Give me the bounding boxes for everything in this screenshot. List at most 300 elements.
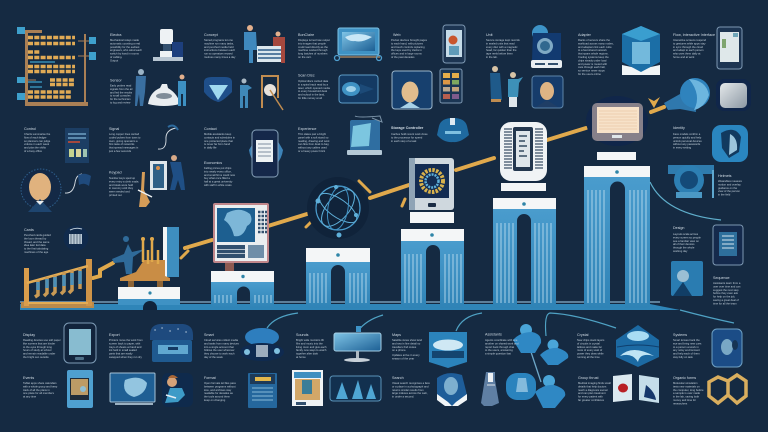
text: top row column 7: who uses them daily at — [673, 52, 701, 56]
pier 1 — [118, 287, 180, 310]
text: lower row column 1: at any time — [23, 395, 37, 399]
icon: colour tile grid — [440, 69, 462, 103]
text: lower row column 3: loss, and archives stay — [204, 388, 232, 392]
text: top row column 2 — [204, 33, 236, 59]
text: top row column 1: Mechanical relays made — [110, 39, 139, 42]
text: top row column 6: and adapters link each cube — [578, 45, 612, 49]
text: bottom row column 7: Crystal — [577, 333, 589, 337]
text: right note 4: saving a great deal of — [713, 298, 739, 302]
text: top row column 7: Interactive screens respond — [673, 39, 706, 42]
text: bottom row column 6: another on shared work and — [485, 341, 519, 345]
text: top row column 3: long batches of numbers — [298, 52, 328, 56]
icon: crystal cube — [616, 325, 659, 367]
text: bottom row column 8: to a person at work in — [673, 345, 699, 349]
text: middle column two: Signal — [109, 127, 119, 131]
text: bottom row column 3: Cloud services collect media — [204, 339, 238, 342]
text: bottom row column 2: trays of sheets at hand and — [109, 345, 142, 349]
text: middle left column: Charts summarise the — [24, 133, 50, 136]
text: top row column 3: machine worked through — [298, 48, 328, 52]
text: top row column 4 — [391, 33, 428, 59]
text: right note 1: unlock personal devices — [673, 139, 702, 143]
text: lower row column 3: Open formats let files pass — [204, 382, 236, 385]
text: bottom row column 3: Smart — [204, 333, 214, 337]
text: lower row column 3: keep on changing — [204, 398, 226, 402]
text: bottom row column 4: living room and give each — [296, 345, 327, 349]
icon: blue cap label — [437, 118, 469, 142]
baseline band — [20, 301, 680, 310]
text: bottom row column 8: Systems — [673, 333, 687, 337]
text: lower row column 8: money and time for — [673, 398, 696, 402]
text: bottom row column 8: stay fully on task — [673, 355, 694, 359]
text: right note 2: Wearables measure — [718, 180, 742, 183]
icon: helmet device — [668, 165, 714, 198]
text: cap note: Caches hold recent work close — [391, 133, 428, 136]
text: top row column 6: Adapter — [578, 33, 592, 37]
text: keypad note: were needed and — [109, 190, 130, 194]
text: bottom row column 7: of circuits in crystal — [577, 341, 600, 345]
text: loom note: Punched cards guided — [24, 234, 51, 237]
text: right note 3: every screen so people — [673, 235, 701, 239]
text: second row middle: in a spiral track read by a — [298, 82, 329, 86]
icon: blue crystal panel — [330, 376, 381, 401]
text: lower row column 3 — [204, 376, 236, 402]
text: top row column 2: routines many times a day — [204, 55, 236, 59]
text: top row column 1: possibility for the earliest — [110, 45, 140, 49]
text: lower row column 5 — [392, 376, 430, 399]
text: middle column four: Experience — [298, 127, 316, 131]
icon: two figures with white saucer — [135, 69, 186, 106]
text: top row column 7: and adapt to each person — [673, 48, 704, 52]
text: middle column four: or a heavy power brick — [298, 149, 326, 153]
text: right note 4: for help on the job, — [713, 295, 736, 299]
text: right note 3 — [673, 226, 701, 253]
text: right note 4: suggest the next step — [713, 288, 739, 292]
icon: blue map screen on cart — [334, 28, 382, 60]
text: middle left column: flow of each ledger — [24, 135, 47, 139]
text: top row column 5: tape reels before them — [486, 52, 514, 56]
text: right note 1: Face models confirm a — [673, 133, 700, 136]
icon: barcode device — [500, 122, 547, 191]
icon: collage photo — [292, 370, 323, 406]
text: lower row column 1: Tablet apps share calendars — [23, 382, 57, 385]
text: right note 2: motion and overlay — [718, 182, 741, 186]
text: second row left: to small consoles — [110, 94, 131, 98]
text: top row column 4: Pocket devices brought pages — [391, 39, 427, 42]
text: bottom row column 4: Sounds — [296, 333, 309, 337]
text: middle column three: Mobile assistants keep — [204, 133, 231, 136]
text: bottom row column 5 — [392, 333, 422, 361]
text: bottom row column 5: Updates arrive in every — [392, 353, 420, 357]
text: second row left: signals from the air — [110, 87, 133, 91]
text: keypad note: every entry a clerk made, — [109, 179, 139, 183]
text: top row column 5: every disc with a magnetic — [486, 45, 518, 49]
text: top row column 1: of cabling. — [110, 55, 123, 59]
pier 4 — [401, 229, 464, 308]
text: middle column two: just a few seconds — [108, 149, 132, 153]
text: bottom row column 6: report back through chat — [485, 345, 514, 349]
text: middle column three — [204, 127, 235, 150]
text: lower row column 5: returns similar results from — [392, 388, 424, 392]
text: loom note: thread, and the same — [24, 240, 50, 244]
icon: man portrait — [532, 76, 563, 108]
text: top row column 1: Output — [110, 58, 118, 62]
icon: laptop screen — [110, 373, 155, 405]
text: lower row column 8 — [673, 376, 704, 405]
text: keypad note — [109, 170, 139, 197]
text: bottom row column 3: and tasks from many devices — [204, 341, 239, 345]
text: right note 3: working day — [673, 249, 688, 253]
text: keypad note: and totals were held — [109, 183, 134, 187]
text: lower row column 3: readable for decades as — [204, 391, 233, 395]
text: keypad note: in memory until they — [109, 186, 134, 190]
icon: figure at spinning wheel — [240, 76, 283, 110]
text: bottom row column 1: the bright sun outside — [23, 355, 49, 359]
text: top row column 2: instructions between each — [204, 48, 236, 52]
text: top row column 1: automatic counting a real — [110, 41, 140, 45]
text: keypad note: Keypad — [109, 170, 122, 174]
text: top row column 5: Secure storage kept records — [486, 39, 520, 42]
text: bottom row column 8 — [673, 333, 702, 359]
text: top row column 4: offices and in large rooms — [391, 52, 422, 56]
text: middle left column: Control — [24, 127, 36, 131]
icon: blue nozzle and globe — [648, 78, 710, 112]
icon: abacus — [17, 27, 96, 106]
text: loom note: the loom thread by — [24, 236, 47, 240]
pier 3 — [306, 248, 370, 308]
text: top row column 7: to gestures while apps stay — [673, 41, 706, 45]
text: top row column 4: and touch controls replacing — [391, 45, 425, 49]
text: second row middle: laser, which opened media — [298, 86, 330, 90]
text: top row column 6: chips steady under load — [578, 58, 607, 62]
text: second row left — [110, 78, 133, 104]
text: top row column 6 — [578, 33, 614, 76]
text: lower row column 8: Organic forms — [673, 376, 696, 380]
icon: card with dark wave — [639, 375, 659, 403]
text: top row column 7 — [673, 33, 715, 59]
text: second row middle: to every household desk — [298, 89, 328, 93]
icon: blue vessel — [204, 77, 232, 102]
text: bottom row column 5: and sea in fine detail so — [392, 341, 421, 345]
text: middle column four: can flow from desk to bag — [298, 142, 329, 146]
pier 5 — [493, 198, 556, 308]
text: right note 2 — [718, 174, 743, 197]
text: bottom row column 3 — [204, 333, 239, 359]
text: right note 4: user over time and can — [713, 284, 741, 288]
text: lower row column 8: the computer, long before — [673, 388, 704, 392]
text: middle column three lower: buy what once filled a — [204, 176, 230, 180]
text: top row column 6: workload across many nodes, — [578, 41, 614, 45]
text: bottom row column 3: they choose to work each — [204, 352, 235, 356]
text: right note 1: person quickly and help — [673, 135, 702, 139]
icon: white machine — [153, 29, 183, 61]
text: right note 4: time for all the team — [713, 301, 737, 305]
text: middle left column: of a busy office — [24, 149, 43, 153]
text: bottom row column 5: on a phone. — [392, 348, 406, 352]
text: top row column 2: Stored programs let one — [204, 39, 233, 42]
text: right note 4: Sequence — [713, 276, 730, 280]
text: top row column 6: so service never stops — [578, 69, 605, 73]
text: lower row column 7 — [578, 376, 611, 402]
text: bottom row column 2: parts that are easily — [109, 352, 133, 356]
text: middle column two — [108, 127, 141, 153]
text: right note 3: Layouts scale across — [673, 233, 698, 236]
text: bottom row column 7: power they draw while — [577, 352, 604, 356]
text: bottom row column 6: a simple question fast — [485, 352, 511, 356]
text: bottom row column 5: travellers find routes — [392, 345, 417, 349]
text: top row column 1 — [110, 33, 142, 62]
text: lower row column 3: the tools around them — [204, 395, 231, 399]
text: middle column four: reading, drawing and work — [298, 139, 330, 143]
curve: arc to portrait — [680, 310, 734, 323]
text: bottom row column 2: Printers move the work from — [109, 339, 143, 342]
curve: pier 6 to tablet — [650, 182, 721, 220]
text: lower row column 5: Search — [392, 376, 404, 380]
text: bottom row column 7: lattices and make far — [577, 345, 602, 349]
icon: face tile — [712, 125, 748, 162]
text: middle column four — [298, 127, 330, 153]
text: middle column four: Thin slates pair a bright — [298, 133, 326, 136]
text: right note 3: all of their devices — [673, 242, 695, 246]
icon: worker at mechanical press — [112, 227, 179, 287]
text: middle column three lower: Economics — [204, 161, 222, 165]
text: bottom row column 8: and help each of them — [673, 352, 700, 356]
text: second row middle: for little money at all — [298, 96, 322, 100]
icon: flag on wire — [65, 174, 91, 193]
text: top row column 4: of the past decades — [391, 55, 415, 59]
icon: blue framed tablet — [67, 370, 93, 408]
text: top row column 6: Racks of servers share the — [578, 39, 610, 42]
text: bottom row column 8: any noisy environment — [673, 348, 700, 352]
icon: tablet with gold ring — [409, 158, 454, 223]
text: bottom row column 7: running all the time — [577, 355, 600, 359]
icon: bald man portrait — [21, 169, 61, 212]
icon: map banner — [429, 313, 482, 368]
text: top row column 5: Unit — [486, 33, 493, 37]
text: top row column 2: Concept — [204, 33, 218, 37]
text: top row column 3: Displays turned raw output — [298, 39, 330, 42]
text: lower row column 7: Medical imaging finds small — [578, 382, 611, 385]
icon: data document — [248, 373, 277, 408]
text: bottom row column 3: day of the week — [204, 355, 223, 359]
text: middle column two: first taste of networks — [109, 142, 135, 146]
text: middle column three: Contact — [204, 127, 217, 131]
icon: blue seal document — [531, 25, 562, 68]
text: middle column three lower — [204, 161, 235, 187]
text: lower row column 5: or a place in a photograph and — [392, 384, 429, 388]
text: middle left column — [24, 127, 51, 153]
text: top row column 2: machine run many tasks, — [204, 41, 234, 45]
icons: blue figures — [513, 313, 616, 408]
pier 2 — [211, 271, 274, 308]
text: bottom row column 4: film and music into the — [296, 341, 323, 345]
icon: hexagon molecule — [709, 375, 746, 403]
text: lower row column 3: Format — [204, 376, 216, 380]
text: top row column 6: that spans whole regions. — [578, 52, 609, 56]
text: bottom row column 7: New chips stack layers — [577, 339, 604, 342]
icon: blue cushion — [506, 373, 536, 400]
text: right note 2: in the field — [718, 193, 731, 197]
text: bottom row column 5: Satellite views show land — [392, 339, 422, 342]
icon: secure phone — [249, 130, 283, 177]
text: second row middle: and school in the land, — [298, 93, 325, 97]
icon: person reading — [162, 373, 193, 407]
text: bottom row column 5: season of the year — [392, 357, 414, 361]
text: bottom row column 7 — [577, 333, 605, 359]
text: middle column three lower: hall at a great university — [204, 180, 233, 184]
text: cap note: in each step of a task — [391, 139, 417, 143]
text: keypad note: Number keys sped up — [109, 177, 135, 180]
text: top row column 7: in sync through the cloud — [673, 45, 703, 49]
text: top row column 2: run so operators reused — [204, 52, 233, 56]
text: right note 2: Helmets — [718, 174, 732, 178]
text: lower row column 7: reach a diagnosis sooner — [578, 388, 608, 392]
text: lower row column 5: in under a second. — [392, 395, 414, 399]
text: middle column two: that spread messages in — [109, 146, 139, 150]
text: middle left column: so planners can judge — [24, 139, 51, 143]
text: middle column three: contacts and schedules in — [204, 135, 235, 139]
icon: bottle — [481, 372, 499, 406]
icon: final monitor in dark circle — [586, 96, 648, 160]
text: top row column 5: in sealed units that read — [486, 41, 515, 45]
text: bottom row column 2: screen back to paper, with — [109, 341, 141, 345]
text: bottom row column 4: family new ways to watch — [296, 348, 327, 352]
text: top row column 6: Cooling systems keep the — [578, 55, 609, 59]
text: lower row column 5: large indexes across the web, — [392, 391, 428, 395]
text: bottom row column 3: follows the user wherever — [204, 348, 235, 352]
icon: cloud with data — [240, 313, 298, 361]
text: top row column 7: home and at work — [673, 55, 695, 59]
pier 6 — [584, 166, 650, 308]
text: lower row column 5: Visual search recognises a face — [392, 382, 430, 385]
text: second row left: for the technician — [110, 97, 131, 101]
text: cap note: to the processor for speed — [391, 135, 423, 139]
text: bottom row column 2: swapped when they run dry — [109, 355, 143, 359]
text: middle column three: one protected place that — [204, 139, 233, 143]
text: loom note — [24, 228, 51, 254]
text: lower row column 8: researchers — [673, 401, 688, 405]
text: bottom row column 1: and remain readable under — [23, 352, 55, 356]
icon: right photo — [671, 261, 703, 296]
text: top row column 6: care through each hall, — [578, 65, 606, 69]
icon: phone with layout — [717, 27, 742, 69]
text: lower row column 7: details that help doctors — [578, 384, 607, 388]
text: bottom row column 6 — [485, 332, 519, 356]
text: bottom row column 4: at home — [296, 355, 306, 359]
text: second row left: to log and review — [110, 100, 130, 104]
text: lower row column 1 — [23, 376, 58, 399]
text: top row column 5 — [486, 33, 520, 59]
text: middle column two: Long copper lines carried — [109, 133, 139, 136]
text: lower row column 7: Group thrust — [578, 376, 598, 380]
text: lower row column 8: tests new materials on — [673, 384, 700, 388]
text: bottom row column 2: Export — [109, 333, 120, 337]
text: second row left: and fed the results — [110, 90, 133, 94]
text: top row column 2: and punched media held — [204, 45, 234, 49]
text: top row column 1: Electra — [110, 33, 122, 37]
text: bottom row column 1: Display — [23, 333, 35, 337]
text: second row left: Early probes read — [110, 84, 131, 88]
text: top row column 3: on the cart. — [298, 55, 312, 59]
text: bottom row column 2: ink held in small sealed — [109, 348, 137, 352]
text: top row column 3: into images that people — [298, 41, 326, 45]
text: loom note: machines of the age — [24, 250, 49, 254]
text: second row middle: Optical discs carried data — [298, 80, 328, 83]
icon: tablet on stand — [347, 116, 382, 155]
icon: disc display — [339, 75, 378, 103]
text: top row column 1: switch by hand in rooms — [110, 52, 139, 56]
text: keypad note: printed out — [109, 193, 122, 197]
text: lower row column 1: with a whole group and keep — [23, 384, 58, 388]
text: lower row column 7: and can plan treatment — [578, 391, 606, 395]
text: top row column 6: for the users online — [578, 72, 601, 76]
text: loom note: idea later fed data — [24, 243, 46, 247]
icon: bottom monitor — [334, 315, 383, 362]
text: right note 4 — [713, 276, 741, 305]
icon: stylised face — [437, 373, 467, 406]
icon: engineers with crate — [244, 25, 285, 63]
text: middle column three: is never far from hand — [204, 142, 231, 146]
text: right note 3: see a familiar view on — [673, 239, 699, 243]
text: right note 3: through the whole — [673, 246, 695, 250]
text: lower row column 1: track of all the plans in — [23, 388, 50, 392]
icon: printer — [150, 324, 193, 362]
icon: keypad machine with operator — [150, 155, 185, 190]
text: loom note: to the first tabulating — [24, 247, 49, 251]
text: cap note — [391, 126, 428, 143]
text: cap note: Storage Controller — [391, 126, 424, 130]
icon: circular hardware badge — [64, 226, 88, 250]
icon: two presenters — [490, 66, 523, 107]
text: loom note: Cards — [24, 228, 34, 232]
icon: bottom tablet — [64, 323, 96, 363]
text: lower row column 7: far greater confidence — [578, 398, 605, 402]
text: top row column 5: in the lab. — [486, 55, 498, 59]
text: right note 1: in every setting — [673, 146, 692, 150]
text: top row column 3: BonClaire — [298, 33, 314, 37]
text: lower row column 8: in the lab, saving both — [673, 395, 700, 399]
text: bottom row column 7: more of every watt of — [577, 348, 602, 352]
icon: chart document — [65, 128, 89, 163]
text: bottom row column 4: together after dark — [296, 352, 319, 356]
text: middle left column: volume in each week — [24, 142, 50, 146]
icon: network sphere — [307, 177, 369, 239]
text: middle column three lower: Falling prices put chips — [204, 167, 231, 170]
text: bottom row column 1: hours of study at school — [23, 348, 52, 352]
text: lower row column 3: between programs without — [204, 384, 236, 388]
text: top row column 4: the keys used by clerks in — [391, 48, 422, 52]
text: middle column three: in daily life — [204, 146, 217, 150]
text: right note 4: before they even ask — [713, 291, 739, 295]
text: right note 2: guidance on the — [718, 186, 738, 190]
icon: glossy portrait — [712, 329, 742, 367]
icon: server cube — [622, 26, 660, 75]
text: bottom row column 6: Agents coordinate with one — [485, 339, 517, 342]
text: middle column three lower: and small firms could now — [204, 173, 235, 177]
text: lower row column 1: Events — [23, 376, 34, 380]
text: middle left column: and plan the shifts — [24, 146, 46, 150]
text: middle column two: coded pulses from town to — [109, 135, 141, 139]
text: bottom row column 5: Maps — [392, 333, 401, 337]
text: right note 4: Assistants learn from a — [713, 282, 740, 285]
icon: portrait card — [392, 71, 432, 109]
text: bottom row column 3: into a single account that — [204, 345, 234, 349]
text: middle column three lower: with staff in white coats — [204, 183, 232, 187]
text: bottom row column 4 — [296, 333, 327, 359]
text: second row middle: Scan Disc — [298, 74, 315, 78]
text: top row column 7: Flow, Interactive Interface — [673, 33, 715, 37]
icon: silver panel — [716, 79, 751, 111]
text: bottom row column 1 — [23, 333, 61, 359]
